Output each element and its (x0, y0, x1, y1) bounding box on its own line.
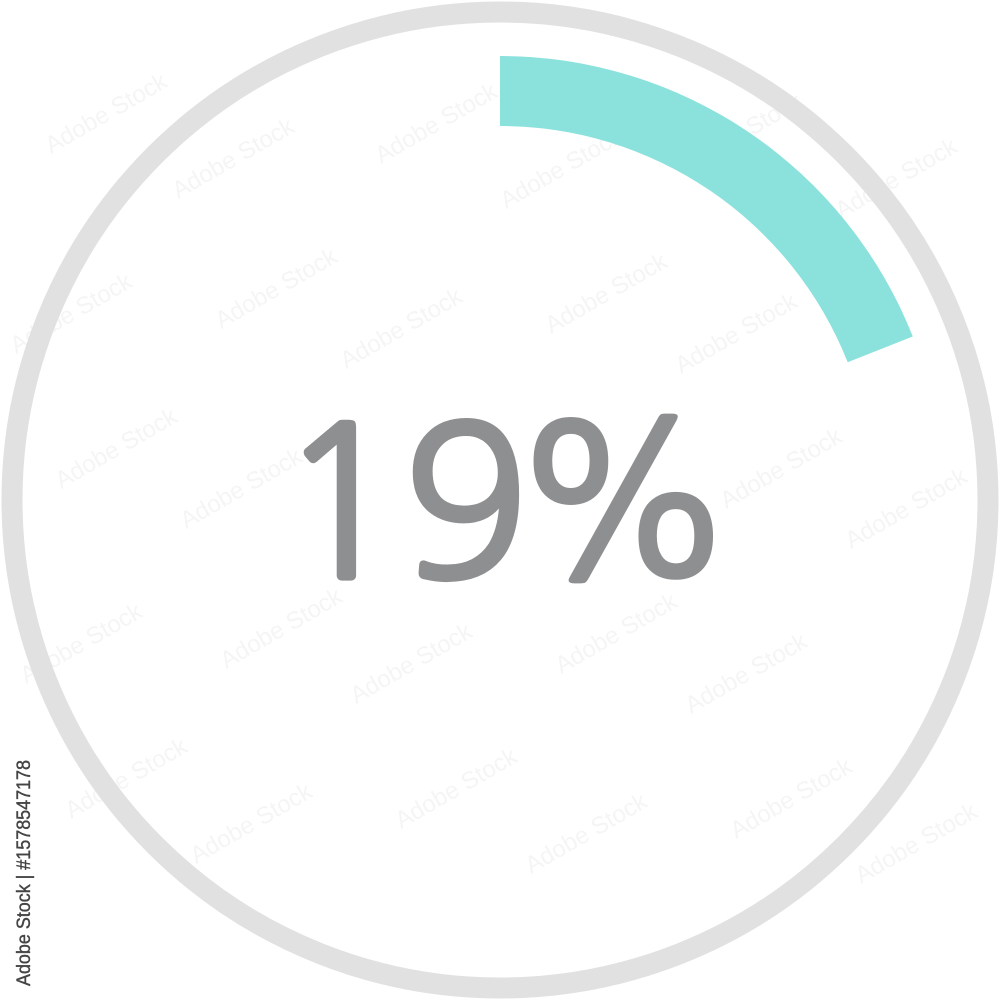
infographic canvas: Adobe Stock (541, 247, 673, 339)
infographic canvas: Adobe Stock (671, 287, 803, 379)
infographic canvas: Adobe Stock (716, 422, 848, 514)
infographic canvas: Adobe Stock (216, 582, 348, 674)
percentage value: 1 (276, 400, 403, 608)
infographic canvas: Adobe Stock (6, 267, 138, 359)
infographic canvas: Adobe Stock (336, 282, 468, 374)
infographic canvas: Adobe Stock (831, 132, 963, 224)
infographic canvas: Adobe Stock (551, 587, 683, 679)
infographic canvas: Adobe Stock (61, 732, 193, 824)
progress arc: 19% (500, 56, 913, 362)
infographic canvas: Adobe Stock (16, 597, 148, 689)
infographic canvas: Adobe Stock (168, 112, 300, 204)
infographic canvas: Adobe Stock (346, 617, 478, 709)
infographic canvas: Adobe Stock (521, 787, 653, 879)
infographic canvas: Adobe Stock (41, 67, 173, 159)
infographic canvas: Adobe Stock (176, 442, 308, 534)
percentage value: 9 (402, 400, 529, 608)
infographic canvas: Adobe Stock (726, 752, 858, 844)
infographic canvas: Adobe Stock (841, 462, 973, 554)
infographic canvas: Adobe Stock (186, 777, 318, 869)
infographic canvas: Adobe Stock (676, 87, 808, 179)
infographic canvas: Adobe Stock (391, 742, 523, 834)
infographic canvas: Adobe Stock (496, 122, 628, 214)
percentage value: % (510, 400, 737, 608)
infographic canvas: Adobe Stock (371, 77, 503, 169)
infographic canvas: Adobe Stock (211, 242, 343, 334)
infographic canvas: Adobe Stock (51, 402, 183, 494)
stock credit: Adobe Stock | #1578547178 (14, 760, 35, 986)
infographic canvas: Adobe Stock (851, 797, 983, 889)
infographic canvas: Adobe Stock (681, 627, 813, 719)
percentage value (276, 400, 737, 608)
